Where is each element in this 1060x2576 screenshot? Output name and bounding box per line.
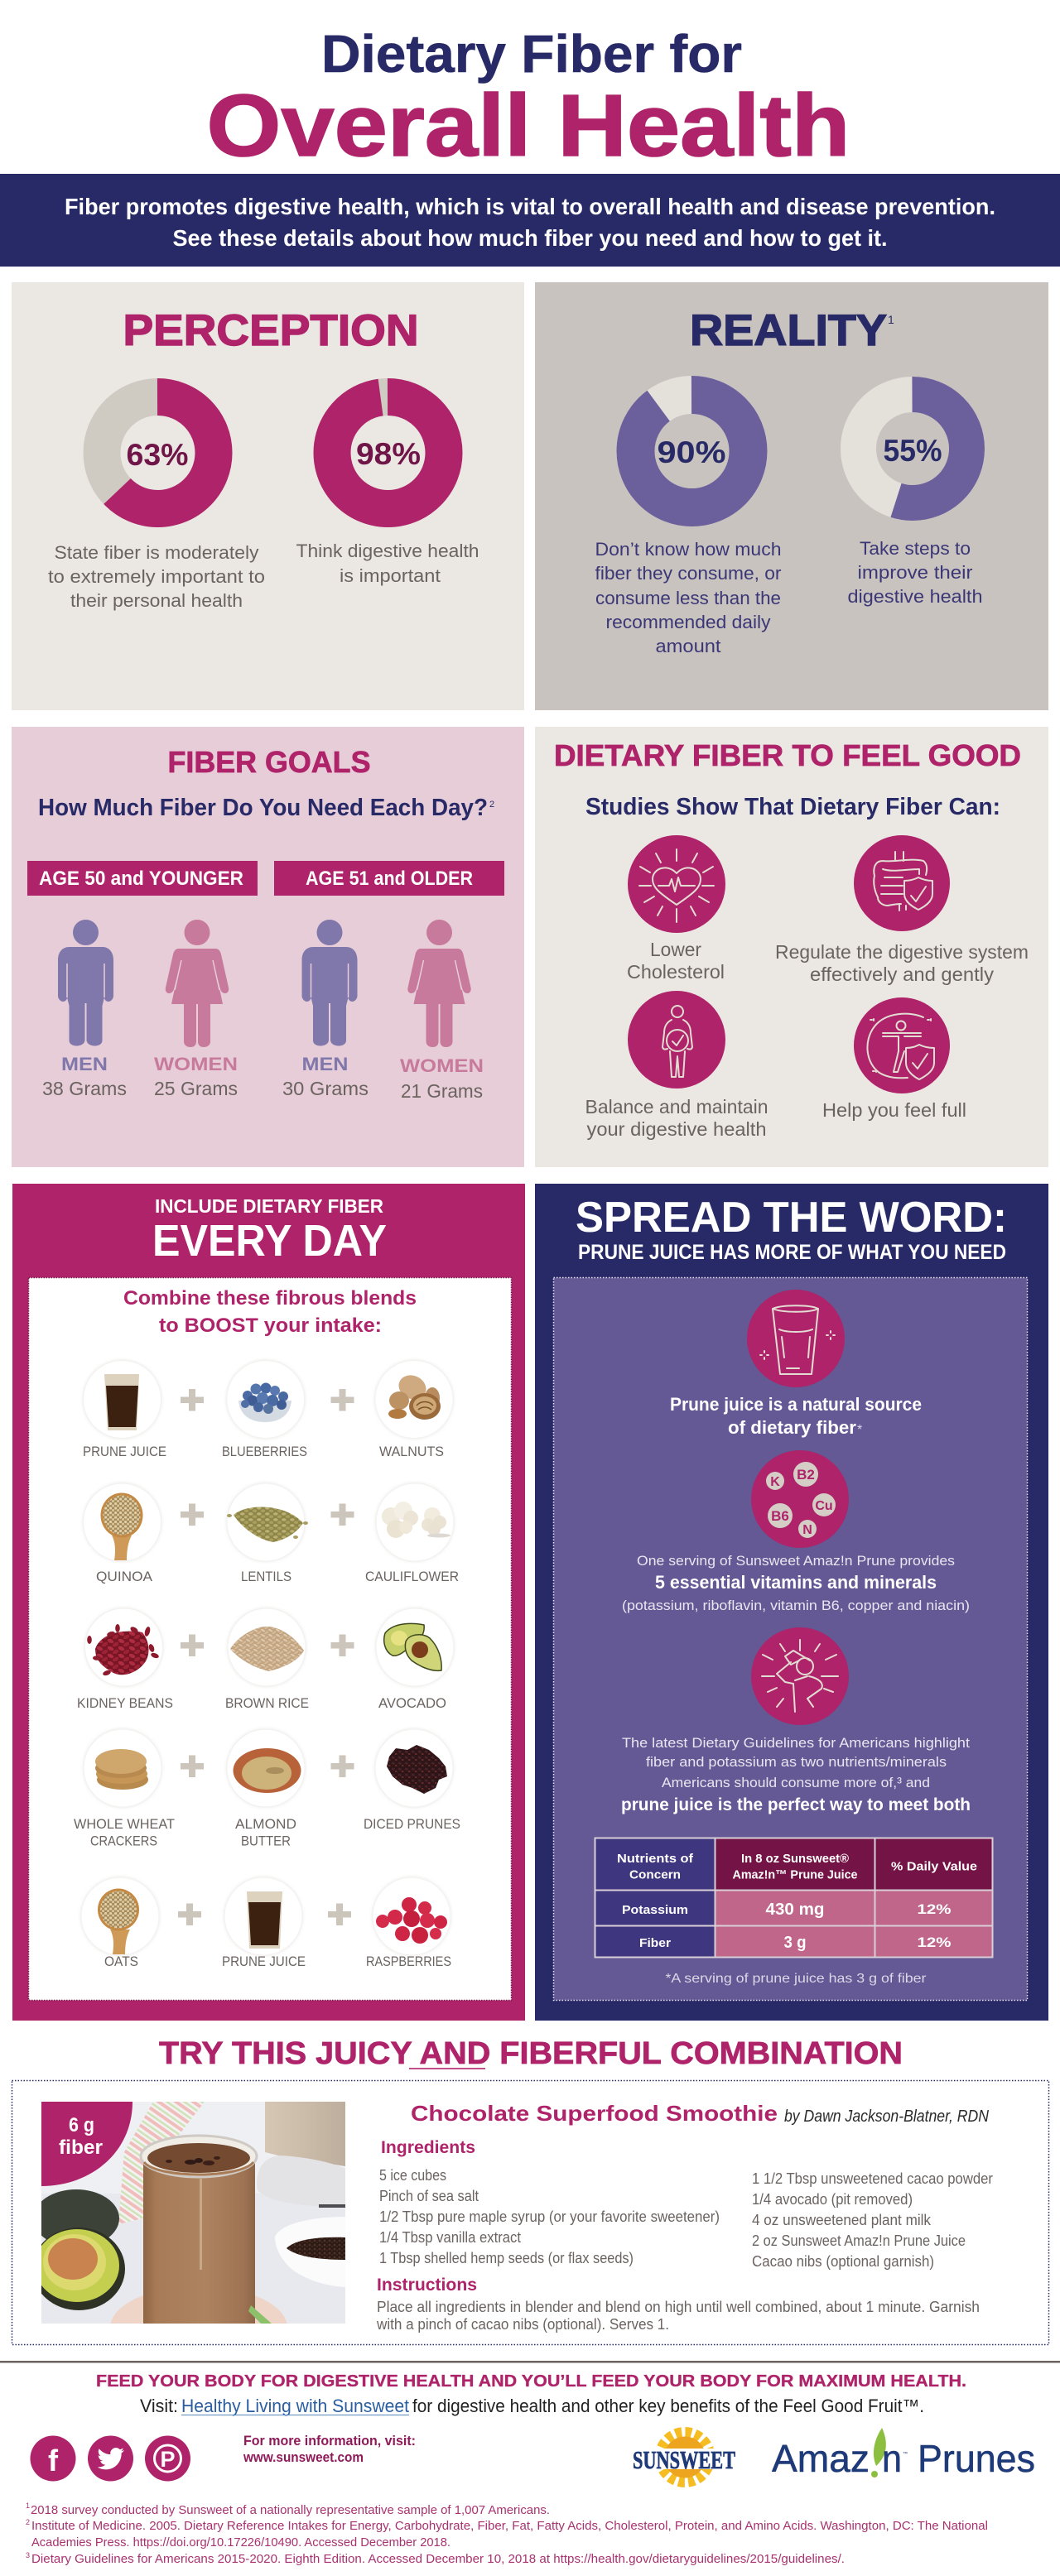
- avocado half: [32, 2228, 125, 2310]
- table: nutrients: Potassium: [622, 1903, 688, 1917]
- food: quinoa: [83, 1483, 161, 1584]
- icon: facebook: f: [48, 2444, 59, 2477]
- heading: spread the word: PRUNE JUICE HAS MORE OF WHAT YOU NEED: [578, 1241, 1006, 1264]
- panel: fiber goals: [12, 727, 524, 1167]
- ingredient list right: Cacao nibs (optional garnish): [752, 2253, 934, 2270]
- footnotes: Dietary Guidelines for Americans 2015-2020. Eighth Edition. Accessed December 10, 2018 at https://health.gov/dietaryguidelines/2015/guidelines/.: [31, 2552, 845, 2566]
- label: CAULIFLOWER: [365, 1569, 459, 1584]
- food: almond butter: [227, 1729, 305, 1849]
- subheading: how much fiber: 2: [489, 800, 494, 810]
- text: essential vitamins: (potassium, riboflavin, vitamin B6, copper and niacin): [622, 1598, 970, 1613]
- text: take steps: digestive health: [848, 586, 982, 607]
- table: nutrients: 12%: [918, 1934, 951, 1950]
- text: visit link: Healthy Living with Sunsweet: [181, 2396, 409, 2416]
- label: PRUNE JUICE: [222, 1954, 306, 1969]
- table: nutrients: 3 g: [783, 1934, 807, 1952]
- text: balance: your digestive health: [586, 1118, 767, 1140]
- food: whole wheat crackers: [74, 1729, 175, 1849]
- text: lower cholesterol: Cholesterol: [627, 961, 725, 983]
- saucer: [111, 2295, 287, 2324]
- text: lower cholesterol: [627, 939, 725, 983]
- subheading: combine: [123, 1287, 417, 1337]
- label: ALMOND: [235, 1816, 296, 1832]
- text: don't know: fiber they consume, or: [595, 563, 782, 584]
- footnotes: Institute of Medicine. 2005. Dietary Reference Intakes for Energy, Carbohydrate, Fiber, Fat, Fatty Acids, Cholesterol, Protein, and Amino Acids. Washington, DC: The National: [31, 2519, 988, 2533]
- badge: 6 g fiber: fiber: [59, 2136, 103, 2159]
- text: don't know: recommended daily: [606, 612, 770, 632]
- text: regulate: effectively and gently: [810, 964, 995, 985]
- text: lower cholesterol: Lower: [650, 939, 701, 960]
- icon: feel full: [854, 997, 950, 1093]
- icon: glass: [747, 1290, 845, 1387]
- text: dietary guidelines: Americans should consume more of,³ and: [662, 1775, 930, 1790]
- intro banner: [0, 174, 1060, 267]
- text: state fiber: State fiber is moderately: [55, 542, 258, 563]
- plus: [181, 1389, 204, 1411]
- table: nutrients: Amaz!n™ Prune Juice: [732, 1867, 858, 1882]
- intro banner: See these details about how much fiber you need and how to get it.: [172, 225, 888, 251]
- text: women 25 grams: 25 Grams: [154, 1078, 238, 1099]
- plus: [331, 1634, 354, 1656]
- heading: every day: INCLUDE DIETARY FIBER: [155, 1195, 383, 1217]
- label: CRACKERS: [90, 1833, 157, 1849]
- label: LENTILS: [241, 1569, 292, 1584]
- footnotes: 2018 survey conducted by Sunsweet of a nationally representative sample of 1,007 Americans.: [31, 2503, 550, 2517]
- text: think digestive: is important: [340, 565, 441, 586]
- food: prune juice: [222, 1877, 306, 1969]
- label: [235, 1816, 296, 1849]
- text: balance: Balance and maintain: [585, 1096, 768, 1117]
- label: PRUNE JUICE: [83, 1444, 166, 1459]
- logo: amazin prunes: Amaz: [772, 2437, 870, 2480]
- table: nutrients: Fiber: [639, 1936, 671, 1950]
- panel: dietary fiber to feel good: [535, 727, 1048, 1167]
- food: cauliflower: [365, 1483, 459, 1584]
- text: state fiber: their personal health: [70, 590, 243, 611]
- donut chart: 98%: [332, 397, 444, 508]
- plus: [328, 1904, 351, 1925]
- text: regulate: Regulate the digestive system: [775, 941, 1029, 963]
- figure: woman 21 grams: [400, 920, 484, 1102]
- logo: amazin prunes: ™: [903, 2451, 908, 2457]
- footnotes: 2: [26, 2518, 30, 2526]
- divider: [0, 2361, 1060, 2362]
- text: dietary guidelines: prune juice is the perfect way to meet both: [621, 1795, 971, 1814]
- ingredient list right: 1 1/2 Tbsp unsweetened cacao powder: [752, 2170, 993, 2187]
- text: essential vitamins: [622, 1553, 970, 1613]
- logo: sunsweet: [633, 2433, 735, 2482]
- logo: amazin prunes: n: [882, 2437, 902, 2480]
- text: women 25 grams: WOMEN: [154, 1054, 238, 1074]
- text: more information: For more information, visit:: [243, 2433, 416, 2449]
- food: oats: [81, 1877, 159, 1969]
- text: men 38 grams: [42, 1054, 127, 1099]
- donut chart: 63%: [102, 397, 214, 508]
- food: brown rice: [225, 1608, 309, 1711]
- ingredient list left: [379, 2167, 720, 2266]
- panel: include dietary fiber every day: [12, 1184, 525, 2021]
- text: men 38 grams: 38 Grams: [42, 1078, 127, 1099]
- blender: [257, 2102, 345, 2208]
- text: essential vitamins: 5 essential vitamins and minerals: [655, 1572, 937, 1593]
- label: BUTTER: [241, 1833, 291, 1849]
- heading: fiber goals: FIBER GOALS: [167, 745, 371, 779]
- label: age 51 and older: [274, 861, 504, 896]
- smoothie glass: [141, 2136, 257, 2324]
- food: walnuts: [375, 1361, 453, 1459]
- food: lentils: [227, 1483, 308, 1584]
- text: more information: www.sunsweet.com: [243, 2449, 364, 2465]
- text: men 30 grams: [282, 1054, 369, 1099]
- icon: pinterest: [145, 2435, 190, 2482]
- food: diced prunes: [364, 1729, 460, 1832]
- table: nutrients: 430 mg: [765, 1901, 825, 1919]
- white card: [28, 1278, 512, 2000]
- icon: pinterest: P: [160, 2447, 176, 2472]
- text: take steps: [848, 538, 982, 607]
- text: natural source: *: [857, 1423, 862, 1437]
- recipe title: Chocolate Superfood Smoothie: [411, 2101, 778, 2126]
- text: women 25 grams: [154, 1054, 238, 1099]
- plus: [181, 1634, 204, 1656]
- icon: vitamins: K: [770, 1475, 780, 1489]
- icon: vitamins: B2: [797, 1467, 815, 1483]
- logo: amazin prunes: [772, 2428, 1035, 2480]
- text: natural source: [670, 1394, 922, 1438]
- plus: [331, 1389, 354, 1411]
- logo: sunsweet: SUNSWEET: [633, 2445, 735, 2474]
- heading: spread the word: SPREAD THE WORD:: [576, 1194, 1007, 1242]
- footnotes: 3: [26, 2551, 30, 2559]
- title: Dietary Fiber for: [321, 24, 742, 84]
- badge: 6 g fiber: [41, 2102, 132, 2186]
- subheading: studies show: Studies Show That Dietary Fiber Can:: [585, 794, 1000, 820]
- logo: amazin prunes: Prunes: [918, 2437, 1035, 2480]
- intro banner: Fiber promotes digestive health, which is vital to overall health and disease prevention.: [65, 194, 995, 219]
- text: visit link: Visit:: [140, 2396, 178, 2416]
- footnotes: Academies Press. https://doi.org/10.17226/10490. Accessed December 2018.: [31, 2535, 450, 2550]
- text: essential vitamins: One serving of Sunsweet Amaz!n Prune provides: [637, 1553, 955, 1569]
- subheading: combine: to BOOST your intake:: [159, 1314, 382, 1337]
- plus: [178, 1904, 201, 1925]
- plus: [181, 1503, 204, 1526]
- purple card: [553, 1278, 1027, 2000]
- food: kidney beans: [77, 1608, 173, 1711]
- avocado back: [41, 2189, 119, 2240]
- figure: woman 25 grams: [154, 920, 238, 1099]
- label: DICED PRUNES: [364, 1816, 460, 1832]
- icon: heart: [628, 835, 725, 933]
- food: prune juice: [83, 1361, 166, 1459]
- label: age 50 and younger: [27, 861, 258, 896]
- ingredient list left: 5 ice cubes: [379, 2167, 446, 2184]
- text: take steps: improve their: [858, 562, 972, 583]
- heading: feel good: DIETARY FIBER TO FEEL GOOD: [554, 738, 1021, 772]
- heading: instructions: Instructions: [377, 2276, 477, 2295]
- donut chart: 63%: 63%: [126, 438, 189, 472]
- donut chart: 98%: 98%: [356, 437, 421, 471]
- green straw: [248, 2305, 272, 2324]
- text: help you feel full: Help you feel full: [822, 1099, 966, 1121]
- panel: spread the word: [535, 1184, 1048, 2021]
- label: QUINOA: [96, 1569, 153, 1584]
- text: women 21 grams: WOMEN: [400, 1055, 484, 1076]
- donut chart: 90%: 90%: [658, 435, 725, 469]
- ingredient list right: 2 oz Sunsweet Amaz!n Prune Juice: [752, 2232, 966, 2249]
- footnotes: [26, 2502, 988, 2566]
- text: men 30 grams: 30 Grams: [282, 1078, 369, 1099]
- figure: man 38 grams: [42, 920, 127, 1099]
- footnotes: 1: [26, 2502, 30, 2510]
- text: don't know: Don’t know how much: [595, 539, 782, 560]
- label: KIDNEY BEANS: [77, 1695, 173, 1711]
- icon: vitamins: N: [802, 1523, 812, 1537]
- icon: twitter: [88, 2435, 133, 2482]
- table: nutrients: Nutrients of: [617, 1852, 694, 1866]
- text: visit link: [140, 2396, 924, 2416]
- text: state fiber: to extremely important to: [48, 566, 265, 587]
- heading: every day: [152, 1195, 387, 1266]
- text: dietary guidelines: The latest Dietary Guidelines for Americans highlight: [622, 1735, 970, 1751]
- heading: try this combination: TRY THIS JUICY AND FIBERFUL COMBINATION: [159, 2036, 903, 2071]
- label: WHOLE WHEAT: [74, 1816, 175, 1832]
- plus: [331, 1755, 354, 1777]
- label: WALNUTS: [379, 1444, 444, 1459]
- icon: intestine with shield: [854, 835, 950, 931]
- heading: reality: REALITY: [690, 306, 887, 355]
- text: natural source: Prune juice is a natural source: [670, 1394, 922, 1415]
- panel: recipe: [12, 2081, 1048, 2369]
- footnote: serving: *A serving of prune juice has 3 g of fiber: [666, 1972, 927, 1986]
- table: nutrients: [595, 1838, 992, 1957]
- icon: person drinking: [751, 1627, 849, 1725]
- icon: vitamins: [751, 1450, 849, 1548]
- instructions text: [376, 2299, 980, 2333]
- label: age 51 and older: AGE 51 and OLDER: [306, 867, 473, 890]
- instructions text: Place all ingredients in blender and blend on high until well combined, about 1 minute. Garnish: [377, 2299, 980, 2315]
- ingredient list left: 1/4 Tbsp vanilla extract: [379, 2229, 521, 2246]
- ingredient list right: 1/4 avocado (pit removed): [752, 2191, 913, 2208]
- text: take steps: Take steps to: [860, 538, 971, 559]
- text: women 21 grams: [400, 1055, 484, 1102]
- table: nutrients: 12%: [918, 1901, 951, 1917]
- donut chart: 55%: [858, 394, 967, 503]
- text: don't know: consume less than the: [595, 588, 781, 608]
- text: men 30 grams: MEN: [301, 1054, 348, 1074]
- icon: vitamins: Cu: [815, 1499, 833, 1513]
- ingredient list left: 1 Tbsp shelled hemp seeds (or flax seeds): [379, 2250, 634, 2266]
- heading: spread the word: [576, 1194, 1007, 1264]
- ingredient list left: Pinch of sea salt: [379, 2188, 479, 2204]
- panel: reality: [535, 282, 1048, 710]
- table: nutrients: Concern: [629, 1867, 681, 1882]
- photo: smoothie: [41, 2102, 345, 2324]
- text: natural source: of dietary fiber: [728, 1417, 856, 1438]
- text: think digestive: Think digestive health: [296, 541, 479, 561]
- text: think digestive: [296, 541, 479, 586]
- plus: [181, 1755, 204, 1777]
- label: [74, 1816, 175, 1849]
- chia bowl: [275, 2217, 345, 2287]
- recipe title: [411, 2101, 989, 2126]
- label: RASPBERRIES: [366, 1954, 451, 1969]
- subheading: how much fiber: How Much Fiber Do You Need Each Day?: [38, 795, 488, 821]
- badge: 6 g fiber: 6 g: [69, 2114, 94, 2136]
- table: nutrients: % Daily Value: [891, 1859, 977, 1874]
- label: BROWN RICE: [225, 1695, 309, 1711]
- text: women 21 grams: 21 Grams: [401, 1080, 483, 1102]
- label: age 50 and younger: AGE 50 and YOUNGER: [39, 867, 243, 890]
- donut chart: 55%: 55%: [883, 434, 942, 468]
- text: balance: [585, 1096, 768, 1140]
- food: blueberries: [222, 1361, 307, 1459]
- title: [207, 24, 850, 175]
- heading: perception: PERCEPTION: [123, 306, 418, 355]
- text: don't know: amount: [656, 636, 720, 656]
- text: dietary guidelines: fiber and potassium as two nutrients/minerals: [646, 1754, 947, 1770]
- label: BLUEBERRIES: [222, 1444, 307, 1459]
- title: Overall Health: [207, 77, 850, 175]
- table: nutrients: In 8 oz Sunsweet®: [741, 1852, 849, 1866]
- plus: [331, 1503, 354, 1526]
- donut chart: 90%: [636, 395, 749, 507]
- heading: reality: 1: [888, 313, 894, 326]
- ingredient list right: [752, 2170, 993, 2270]
- text: don't know: [595, 539, 782, 656]
- straws: [118, 2102, 205, 2224]
- text: regulate: [775, 941, 1029, 985]
- figure: man 30 grams: [282, 920, 369, 1099]
- heading: ingredients: Ingredients: [381, 2138, 475, 2157]
- recipe title: by Dawn Jackson-Blatner, RDN: [784, 2107, 989, 2126]
- text: visit link: for digestive health and other key benefits of the Feel Good Fruit™.: [412, 2396, 924, 2416]
- label: OATS: [104, 1954, 138, 1969]
- food: avocado: [376, 1608, 454, 1711]
- text: state fiber: [48, 542, 265, 611]
- icon: balanced body: [628, 991, 725, 1089]
- subheading: combine: Combine these fibrous blends: [123, 1287, 417, 1310]
- instructions text: with a pinch of cacao nibs (optional). Serves 1.: [376, 2316, 669, 2333]
- panel: perception: [12, 282, 524, 710]
- text: men 38 grams: MEN: [61, 1054, 108, 1074]
- icon: vitamins: B6: [771, 1508, 789, 1524]
- text: dietary guidelines: [621, 1735, 971, 1814]
- icon: facebook: [30, 2435, 76, 2482]
- ingredient list right: 4 oz unsweetened plant milk: [752, 2212, 932, 2228]
- text: more information: [243, 2433, 416, 2465]
- callout: feed your body: FEED YOUR BODY FOR DIGESTIVE HEALTH AND YOU’LL FEED YOUR BODY FOR MAXIMUM HEALTH.: [96, 2372, 966, 2391]
- heading: every day: EVERY DAY: [152, 1216, 387, 1266]
- ingredient list left: 1/2 Tbsp pure maple syrup (or your favorite sweetener): [379, 2208, 720, 2225]
- food: raspberries: [366, 1877, 451, 1969]
- label: AVOCADO: [378, 1695, 446, 1711]
